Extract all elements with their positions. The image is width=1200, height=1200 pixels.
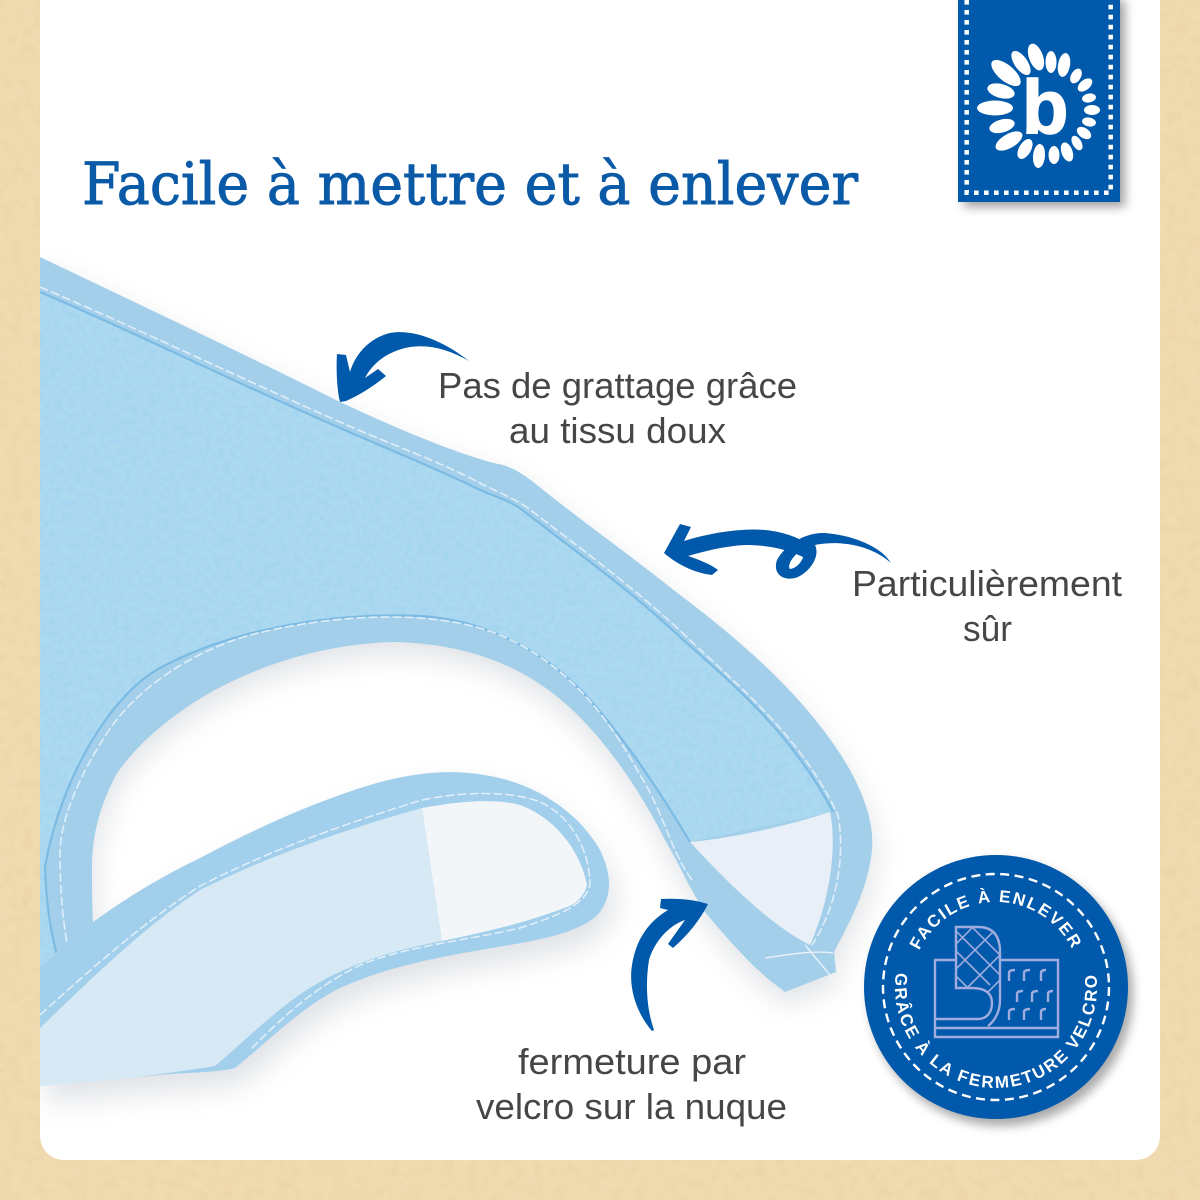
- terry towel surface: [40, 292, 833, 970]
- arrow to bib side: [664, 524, 891, 579]
- badge top label: FACILE À ENLEVER: [909, 888, 1080, 950]
- icon: velcro strip: [925, 925, 1058, 1037]
- tag shadow: [964, 0, 1125, 207]
- brand tag: [958, 0, 1125, 207]
- callout: safe: [852, 563, 1122, 649]
- callout: velcro closure: [476, 1041, 787, 1127]
- callout: soft fabric: au tissu doux: [509, 410, 726, 451]
- callout: velcro closure: velcro sur la nuque: [476, 1086, 787, 1127]
- flower logo: [977, 41, 1100, 168]
- soft shadow under bib: [40, 483, 883, 1109]
- velcro patch on bib: [690, 812, 833, 945]
- terry texture: [40, 314, 816, 946]
- bib corner stitching: [765, 945, 833, 975]
- badge bottom label: GRÂCE À LA FERMETURE VELCRO: [894, 974, 1098, 1088]
- callout: soft fabric: Pas de grattage grâce: [438, 365, 797, 406]
- bib photo: [40, 257, 874, 1102]
- callout: soft fabric: [438, 365, 797, 451]
- tag dotted seam: [967, 0, 1111, 193]
- strap inner fabric: [40, 808, 442, 1086]
- badge dashed ring: [883, 874, 1109, 1100]
- tag body: [958, 0, 1120, 202]
- callout: safe: sûr: [963, 608, 1012, 649]
- strap stitching: [40, 794, 590, 1050]
- callout: velcro closure: fermeture par: [518, 1041, 746, 1082]
- strap velcro patch: [422, 801, 587, 941]
- bib binding body: [40, 257, 872, 1000]
- strap binding: [40, 772, 609, 1086]
- title: Facile à mettre et à enlever: [82, 150, 858, 218]
- callout: safe: Particulièrement: [852, 563, 1122, 604]
- outer stitching: [40, 287, 841, 945]
- arrow to bib edge: [337, 332, 469, 402]
- badge disc: [864, 855, 1128, 1119]
- arrow to velcro: [631, 899, 708, 1031]
- badge shadow: [869, 862, 1133, 1126]
- badge: easy removal: [863, 855, 1139, 1132]
- inner neck stitching: [60, 617, 692, 943]
- flower logo: b: [1022, 65, 1068, 150]
- terry edge shading: [40, 292, 833, 955]
